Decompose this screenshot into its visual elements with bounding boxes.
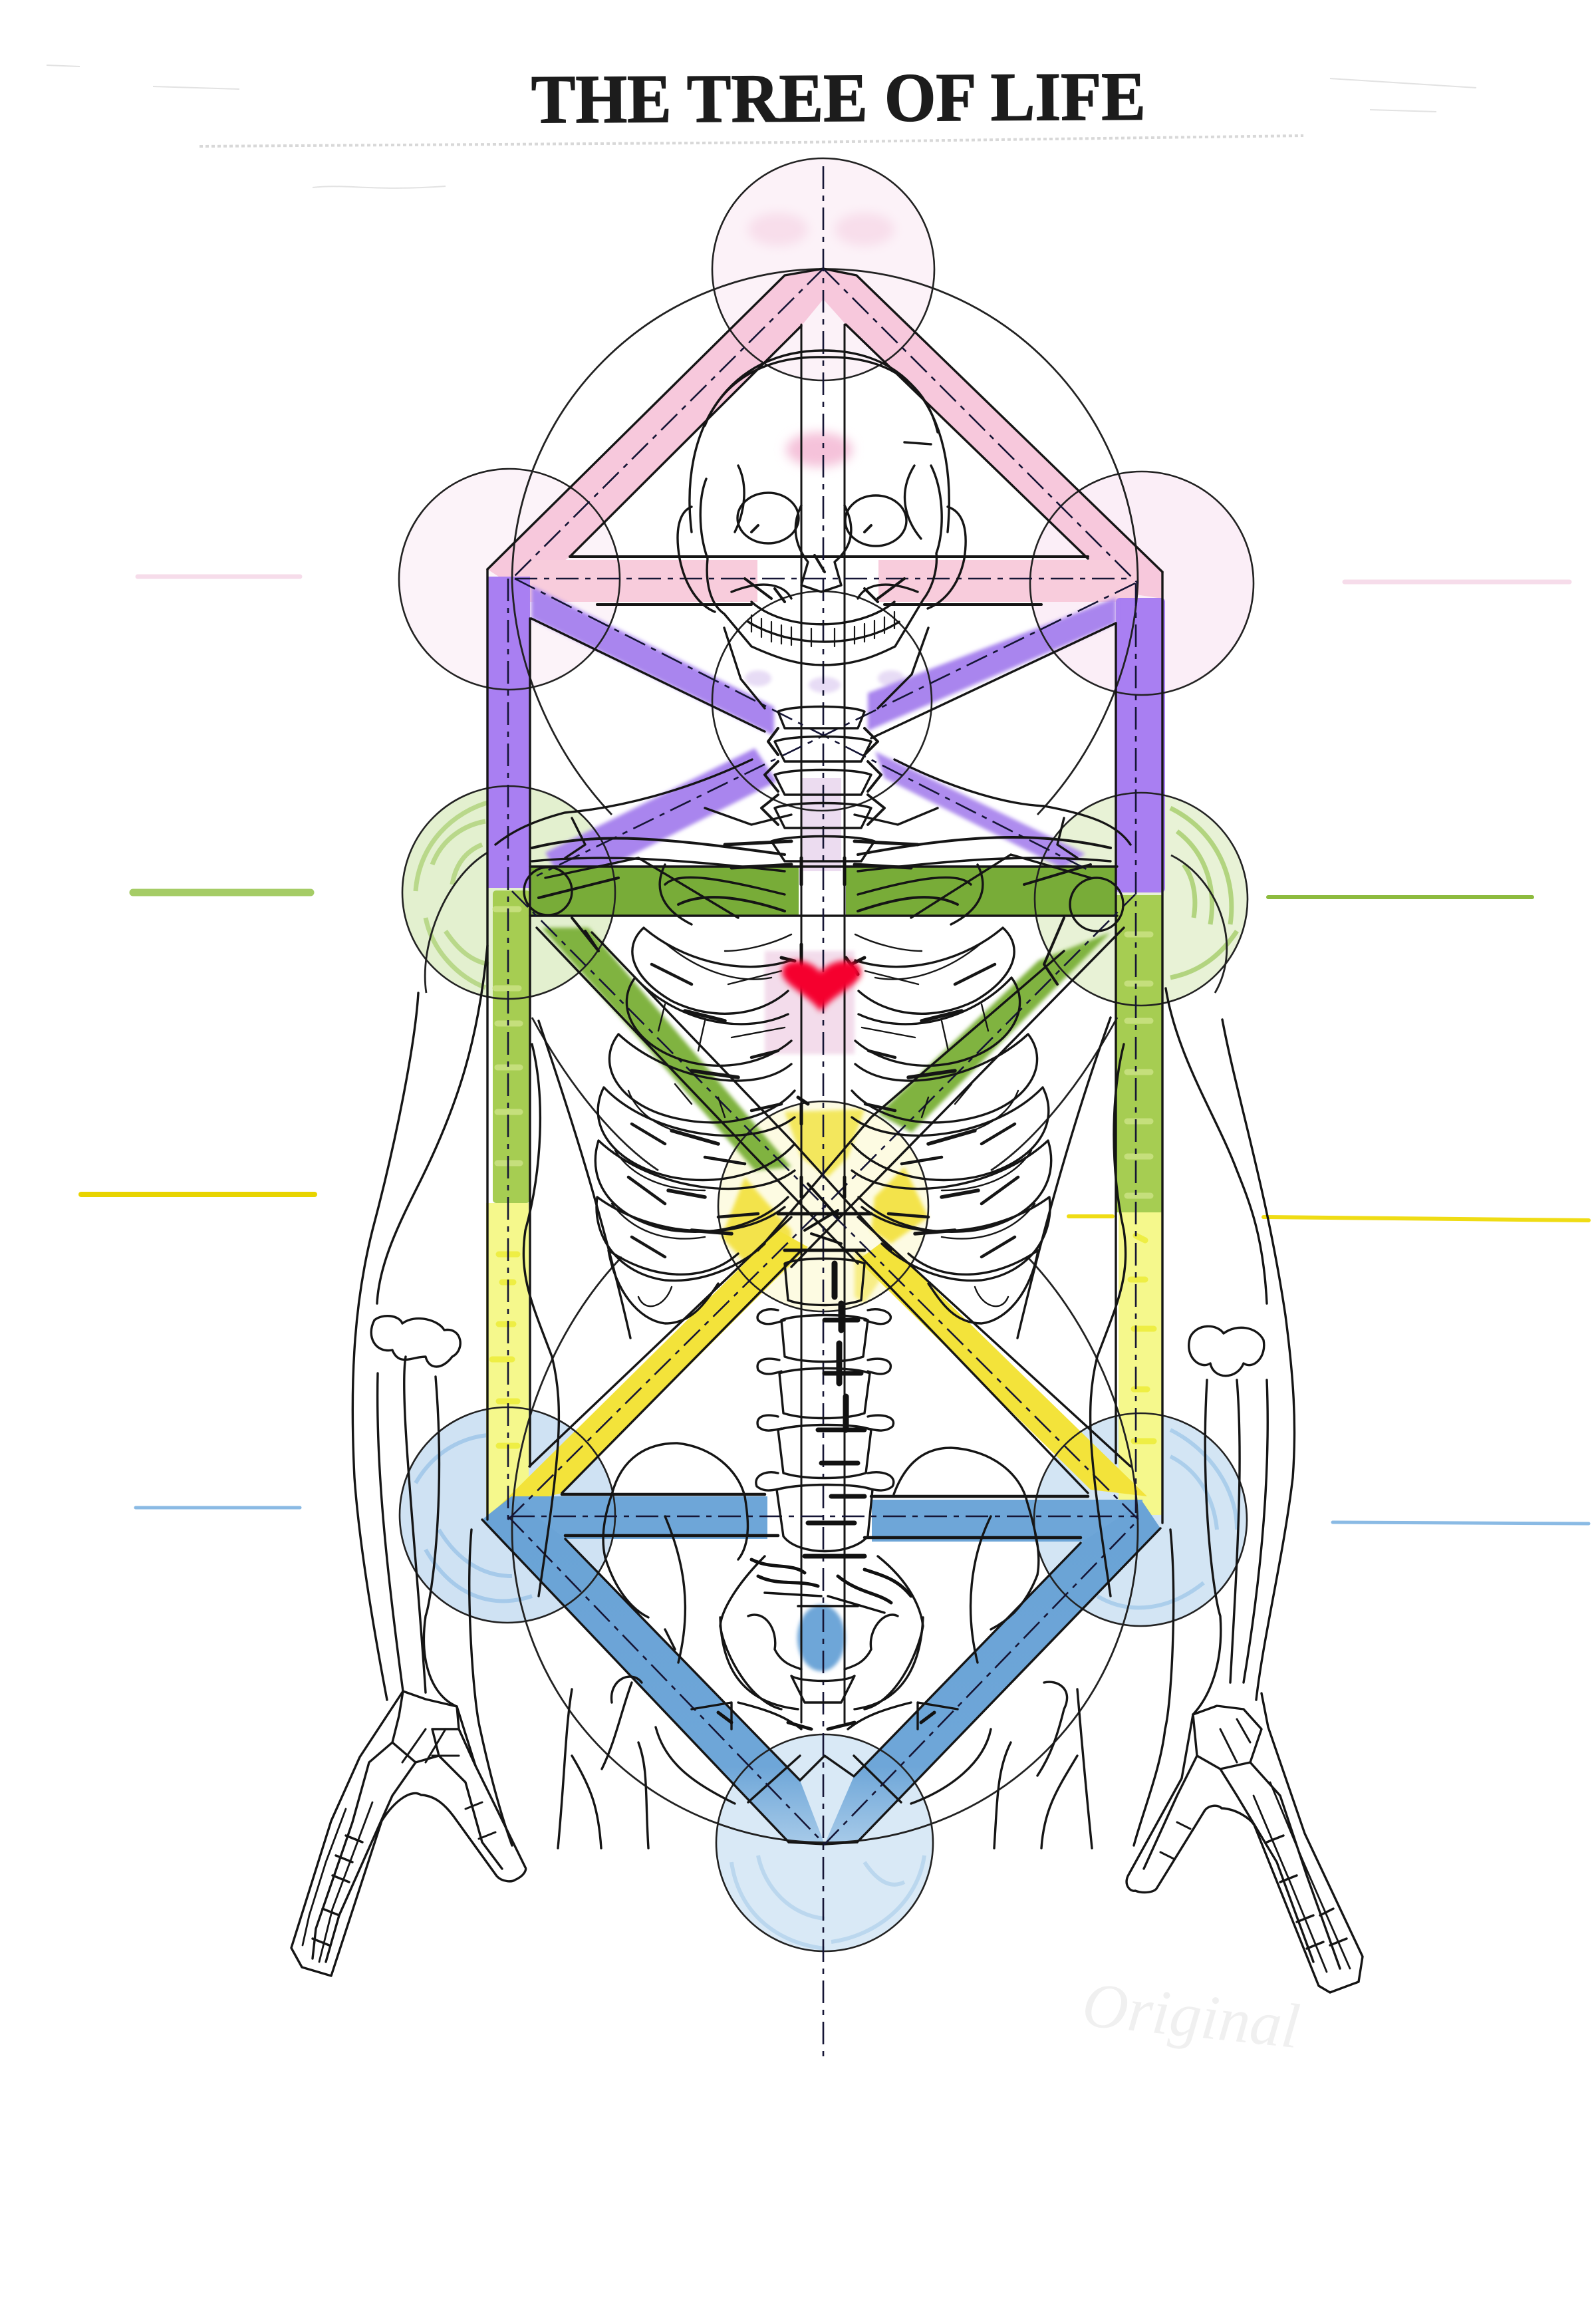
mark: blue left (136, 1506, 300, 1510)
band: yellow diagonal left (495, 1230, 808, 1510)
band: blue horizontal (511, 1496, 1142, 1542)
band: green horizontal (531, 867, 1116, 916)
mark: pink right (1345, 580, 1569, 584)
ribs right (mirror) (852, 928, 1051, 1323)
right hand (1127, 1693, 1363, 1992)
circle outlines (399, 158, 1254, 1951)
colour bands of the tree (482, 269, 1165, 1844)
band: purple vertical left (487, 577, 530, 888)
lumbar vertebrae (756, 1258, 894, 1551)
neck and shoulders (495, 759, 1130, 984)
pelvis dark marks (718, 1556, 934, 1729)
geometry outlines (399, 158, 1254, 2062)
ribs left (595, 928, 795, 1323)
sphere: bottom blue (716, 1734, 933, 1951)
margin colour marks (81, 577, 1589, 1524)
skull (678, 350, 966, 708)
mark: green right (1268, 895, 1532, 899)
band: blue diagonal left (482, 1496, 825, 1844)
band: yellow vertical left (486, 1203, 529, 1520)
mark: blue right (1333, 1522, 1589, 1524)
sphere: crown (712, 158, 934, 380)
mark: yellow right (1069, 1216, 1589, 1220)
band edge lines (482, 269, 1162, 1844)
pelvis (558, 1443, 1092, 1848)
band: blue diagonal right (825, 1502, 1160, 1844)
faint signature: Original (1079, 1969, 1303, 2062)
sphere: yellow (718, 1101, 928, 1311)
band: green vertical right (1116, 895, 1162, 1212)
right arm (1017, 988, 1295, 1845)
band: green diagonal left (542, 928, 791, 1170)
cervical vertebrae (761, 706, 884, 861)
band: pink roof left (487, 269, 823, 585)
sphere: right pink (1030, 472, 1254, 695)
sphere: right blue (1034, 1413, 1247, 1626)
left hand (291, 1691, 526, 1976)
band: pink horizontal (520, 560, 1138, 602)
sacrum blue patch (797, 1605, 845, 1671)
band: pink roof right (823, 269, 1162, 599)
rungs on the vertical bands (492, 909, 1154, 1446)
skeleton drawing (291, 350, 1363, 1992)
mark: green left (133, 888, 311, 896)
band: purple diagonal lower left (545, 748, 777, 888)
sphere: right green (1035, 793, 1248, 1006)
spine dark marks (778, 858, 871, 1523)
band: purple diagonal upper right (868, 598, 1116, 731)
scan artefacts (47, 65, 1476, 188)
pale forehead, neck and chest glow (745, 432, 904, 1054)
title: THE TREE OF LIFE (531, 59, 1146, 138)
dashed centre lines (508, 166, 1138, 2062)
sphere: left green (402, 786, 615, 999)
left arm (352, 946, 630, 1845)
band: green diagonal right (878, 932, 1111, 1133)
band: purple vertical right (1116, 598, 1165, 892)
band: yellow diagonal right (858, 1240, 1147, 1496)
heart (782, 961, 861, 1012)
sphere: left blue (400, 1407, 615, 1623)
mark: pink left (138, 575, 300, 579)
mark: yellow left (81, 1192, 315, 1197)
shoulder arcs and large upper and lower circles (425, 269, 1227, 1842)
band: yellow vertical right (1119, 1212, 1162, 1515)
sephiroth circles (399, 158, 1254, 1951)
band: green vertical left (493, 890, 530, 1203)
band: purple diagonal lower right (875, 751, 1085, 869)
sphere: left pink (399, 469, 620, 690)
band: purple diagonal upper left (531, 586, 774, 736)
